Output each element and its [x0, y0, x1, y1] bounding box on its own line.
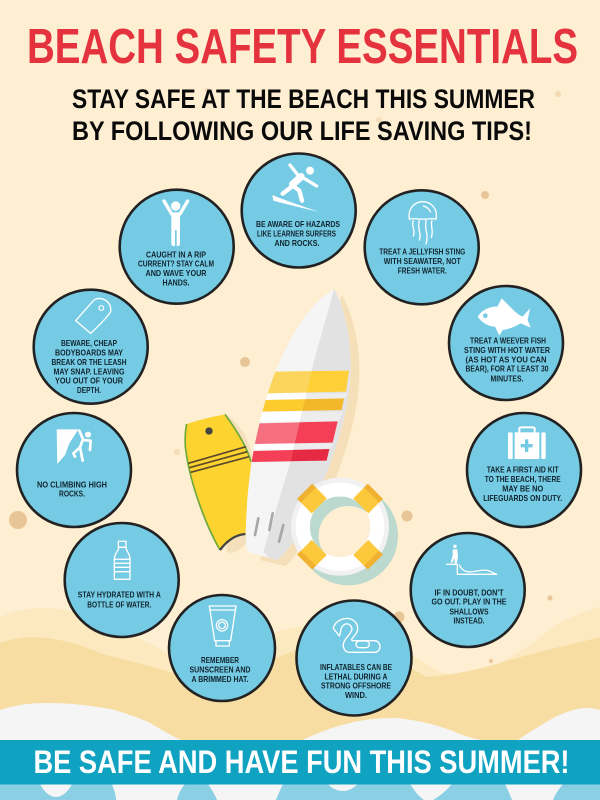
- text: rip current: AND WAVE YOUR: [146, 268, 206, 278]
- surfboard: [246, 290, 360, 566]
- text: surfer hazards: BE AWARE OF HAZARDS: [256, 219, 340, 229]
- text: surfer hazards: AND ROCKS.: [274, 238, 320, 248]
- text: inflatables: INFLATABLES CAN BE: [320, 662, 392, 672]
- text: rip current: CAUGHT IN A RIP: [146, 249, 206, 259]
- text: first aid kit: [483, 464, 562, 503]
- text: bodyboard leash: YOU OUT OF YOUR: [55, 376, 123, 386]
- text: jellyfish: [379, 247, 465, 276]
- text: bottle of water: BOTTLE OF WATER.: [87, 599, 151, 609]
- icon: person waving: [164, 201, 188, 246]
- text: shallows: INSTEAD.: [454, 616, 484, 626]
- icon: sunscreen tube: [209, 606, 236, 646]
- text: rip current: [138, 249, 214, 287]
- text: weever fish: TREAT A WEEVER FISH: [470, 335, 546, 345]
- text: jellyfish: TREAT A JELLYFISH STING: [379, 247, 465, 257]
- text: shallows: [432, 587, 507, 626]
- panel: sunscreen: [169, 595, 275, 701]
- panel: weever fish: [449, 286, 563, 400]
- icon: surfer: [272, 165, 319, 212]
- text: weever fish: (AS HOT AS YOU CAN: [466, 354, 547, 364]
- text: bodyboard leash: BREAK OR THE LEASH: [52, 357, 127, 367]
- icon: jellyfish: [409, 202, 436, 244]
- text: rip current: CURRENT? STAY CALM: [138, 259, 214, 269]
- text: rip current: HANDS.: [162, 277, 190, 287]
- background: sand speckles: [9, 88, 561, 663]
- text: first aid kit: LIFEGUARDS ON DUTY.: [483, 493, 562, 503]
- text: first aid kit: MAY BE NO: [502, 483, 544, 493]
- text: bodyboard leash: [52, 338, 127, 395]
- panel: inflatables: [296, 600, 412, 716]
- text: inflatables: STRONG OFFSHORE: [321, 681, 391, 691]
- text: no climbing: NO CLIMBING HIGH: [37, 479, 107, 489]
- panel: jellyfish: [365, 190, 479, 304]
- icon: climber on rock: [57, 429, 91, 464]
- text: jellyfish: WITH SEAWATER, NOT: [384, 256, 461, 266]
- text: surfer hazards: LIKE LEARNER SURFERS: [257, 229, 336, 239]
- icon: inflatable flamingo: [333, 618, 380, 652]
- text: sunscreen: SUNSCREEN AND: [190, 665, 250, 675]
- subtitle: [72, 84, 535, 146]
- text: shallows: IF IN DOUBT, DON'T: [434, 587, 504, 597]
- panel: surfer hazards: [242, 154, 356, 268]
- panel: bottle of water: [65, 523, 179, 637]
- text: sunscreen: REMEMBER: [201, 655, 239, 665]
- text: first aid kit: TAKE A FIRST AID KIT: [487, 464, 559, 474]
- text: bodyboard leash: BODYBOARDS MAY: [55, 347, 123, 357]
- text: sunscreen: A BRIMMED HAT.: [192, 674, 248, 684]
- lifebuoy: [269, 456, 411, 597]
- text: bodyboard leash: BEWARE, CHEAP: [61, 338, 117, 348]
- text: weever fish: [464, 335, 550, 383]
- icon: first aid kit: [508, 427, 546, 459]
- text: inflatables: [320, 662, 392, 700]
- subtitle: BY FOLLOWING OUR LIFE SAVING TIPS!: [72, 116, 532, 146]
- text: surfer hazards: [256, 219, 340, 248]
- text: no climbing: ROCKS.: [59, 489, 85, 499]
- panel: no climbing: [17, 413, 131, 527]
- text: shallows: GO OUT. PLAY IN THE: [432, 597, 507, 607]
- icon: fish: [478, 298, 531, 336]
- text: weever fish: STING WITH HOT WATER: [464, 345, 550, 355]
- beach illustration: bodyboard, surfboard and lifebuoy: [184, 290, 398, 586]
- text: bodyboard leash: DEPTH.: [77, 385, 101, 395]
- text: bodyboard leash: MAY SNAP. LEAVING: [54, 366, 124, 376]
- icon: walking into shallows: [447, 545, 497, 574]
- panel: first aid kit: [467, 413, 581, 527]
- background: white surf: [0, 703, 600, 742]
- text: inflatables: LETHAL DURING A: [324, 671, 388, 681]
- text: jellyfish: FRESH WATER.: [398, 266, 447, 276]
- bodyboard: [185, 414, 253, 553]
- bottom waves: [0, 784, 600, 800]
- text: no climbing: [37, 479, 107, 499]
- text: shallows: SHALLOWS: [450, 606, 489, 616]
- text: sunscreen: [190, 655, 250, 684]
- icon: bodyboard: [76, 298, 111, 333]
- text: weever fish: MINUTES.: [490, 373, 524, 383]
- panel: shallows: [411, 533, 525, 647]
- text: weever fish: BEAR), FOR AT LEAST 30: [466, 364, 549, 374]
- text: first aid kit: TO THE BEACH, THERE: [485, 474, 561, 484]
- panel: bodyboard leash: [34, 290, 148, 404]
- text: bottle of water: [78, 590, 161, 609]
- background: sand dunes: [0, 607, 600, 760]
- icon: water bottle: [114, 541, 130, 579]
- text: bottle of water: STAY HYDRATED WITH A: [78, 590, 161, 600]
- panel: rip current: [120, 190, 234, 304]
- text: inflatables: WIND.: [345, 690, 367, 700]
